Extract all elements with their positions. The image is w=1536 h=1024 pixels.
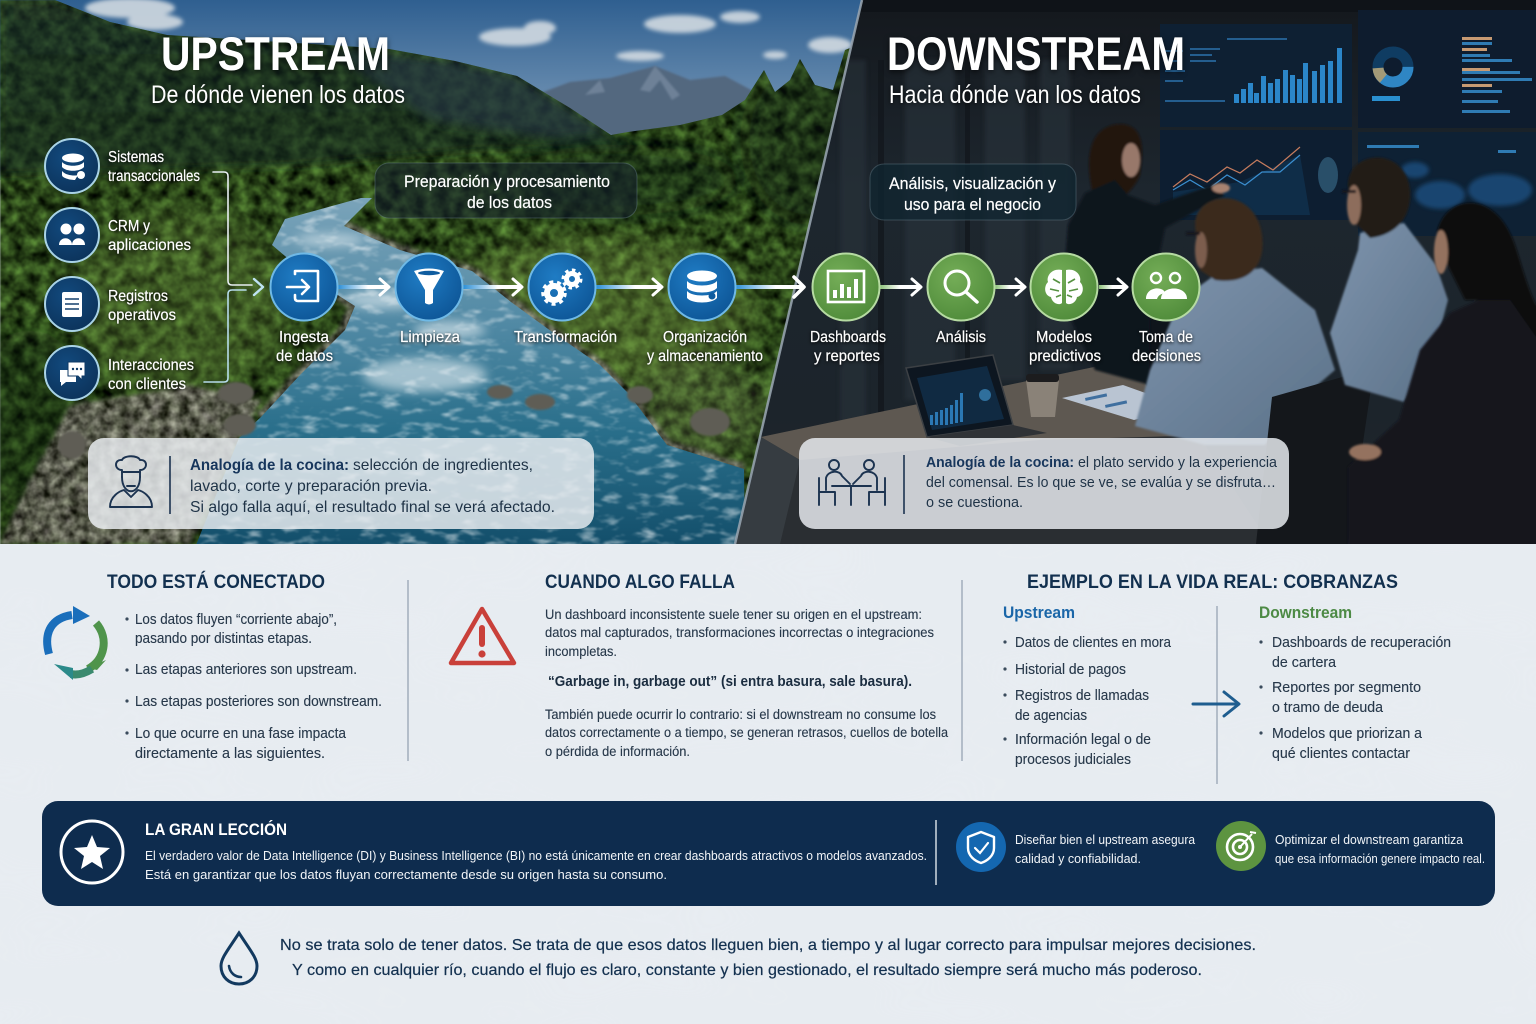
callout: analogía upstream: selección de ingredientes, (353, 457, 533, 474)
text block: “Garbage in, garbage out” (si entra basura, sale basura). (548, 674, 912, 690)
panel: downstream office scene (730, 0, 1536, 550)
callout: analogía downstream (799, 438, 1289, 529)
step: organización y almacenamiento: y almacenamiento (647, 348, 763, 365)
text block: datos mal capturados, transformaciones incorrectas o integraciones (545, 625, 934, 640)
lesson text (145, 820, 927, 882)
source: interacciones con clientes: Interacciones (108, 357, 194, 374)
icon: star (61, 821, 123, 883)
source: sistemas transaccionales: Sistemas (108, 149, 164, 166)
heading: CUANDO ALGO FALLA (545, 572, 735, 593)
arrows: upstream flow (338, 277, 804, 297)
arrows: downstream flow (880, 279, 1127, 295)
title: upstream (151, 27, 405, 109)
column: downstream (1259, 604, 1451, 762)
callout: analogía upstream: Analogía de la cocina: (190, 457, 349, 474)
caption box: preparación (375, 163, 637, 218)
analyst front (1135, 198, 1335, 445)
bullet list: Lo que ocurre en una fase impacta (135, 726, 347, 742)
column: upstream: Registros de llamadas (1015, 688, 1149, 704)
column: upstream: Información legal o de (1015, 732, 1151, 748)
callout: analogía downstream: o se cuestiona. (926, 494, 1023, 511)
presenter (1062, 124, 1230, 385)
step: dashboards y reportes: Dashboards (810, 329, 886, 346)
takeaway: upstream: calidad y confiabilidad. (1015, 851, 1141, 866)
bullet list: Las etapas posteriores son downstream. (135, 694, 382, 710)
column: downstream: Reportes por segmento (1272, 680, 1421, 696)
lesson text: Está en garantizar que los datos fluyan correctamente desde su origen hasta su consumo. (145, 867, 667, 882)
source: crm y aplicaciones: CRM y (108, 218, 150, 235)
step: ingesta de datos (270, 254, 338, 365)
icon: water drop (221, 933, 257, 984)
step: transformación: Transformación (514, 329, 617, 346)
column: downstream: Downstream (1259, 604, 1352, 622)
closing statement: No se trata solo de tener datos. Se trata de que esos datos lleguen bien, a tiempo y al lugar correcto para impulsar mejores decisiones. (280, 937, 1256, 954)
step: organización y almacenamiento (647, 254, 763, 365)
source: registros operativos (45, 277, 176, 331)
column: downstream: Dashboards de recuperación (1272, 635, 1451, 651)
river (180, 195, 750, 555)
source: registros operativos: Registros (108, 288, 168, 305)
panel: data sources (45, 139, 200, 400)
arrow: sources bracket (204, 172, 263, 382)
callout: analogía downstream: Analogía de la cocina: (926, 454, 1074, 471)
lesson text: El verdadero valor de Data Intelligence (DI) y Business Intelligence (BI) no está únicamente en crear dashboards atractivos o modelos avanzados. (145, 848, 927, 863)
title: downstream: Hacia dónde van los datos (889, 81, 1141, 109)
column: downstream: de cartera (1272, 655, 1337, 671)
callout: analogía upstream (88, 438, 594, 529)
icon: cycle arrows (47, 606, 106, 680)
closing statement (280, 937, 1256, 979)
forest (0, 0, 880, 545)
rock banks (0, 220, 746, 544)
closing statement: Y como en cualquier río, cuando el flujo es claro, constante y bien gestionado, el resultado siempre será mucho más poderoso. (292, 962, 1202, 979)
icon: chef (110, 456, 152, 507)
step: dashboards y reportes: y reportes (814, 348, 880, 365)
column: upstream (1003, 604, 1172, 768)
title: downstream: DOWNSTREAM (887, 27, 1185, 80)
step: ingesta de datos: de datos (276, 348, 333, 365)
step: toma de decisiones: decisiones (1132, 348, 1201, 365)
text block: incompletas. (545, 644, 617, 659)
panel: cuando algo falla (451, 572, 948, 759)
column: upstream: Historial de pagos (1015, 662, 1126, 678)
heading: EJEMPLO EN LA VIDA REAL: COBRANZAS (1027, 572, 1398, 593)
step: limpieza: Limpieza (400, 329, 460, 346)
step: modelos predictivos: predictivos (1029, 348, 1101, 365)
takeaway: downstream: que esa información genere impacto real. (1275, 851, 1485, 866)
caption box: análisis (870, 164, 1076, 220)
text block: datos correctamente o a tiempo, se generan retrasos, cuellos de botella (545, 725, 948, 740)
step: limpieza (396, 254, 462, 346)
step: organización y almacenamiento: Organización (663, 329, 747, 346)
lesson text: LA GRAN LECCIÓN (145, 820, 287, 839)
takeaway: upstream: Diseñar bien el upstream asegura (1015, 832, 1196, 847)
panel: la gran lección (42, 801, 1495, 906)
source: interacciones con clientes (45, 346, 194, 400)
caption box: análisis: Análisis, visualización y (889, 174, 1056, 193)
source: crm y aplicaciones (45, 208, 191, 262)
callout: analogía upstream: Si algo falla aquí, el resultado final se verá afectado. (190, 499, 555, 516)
takeaway: upstream (956, 822, 1196, 872)
column: upstream: Upstream (1003, 604, 1075, 622)
takeaway: downstream: Optimizar el downstream garantiza (1275, 832, 1464, 847)
text block: También puede ocurrir lo contrario: si el downstream no consume los (545, 707, 936, 722)
column: downstream: qué clientes contactar (1272, 746, 1410, 762)
heading: TODO ESTÁ CONECTADO (107, 571, 325, 593)
column: upstream: Datos de clientes en mora (1015, 635, 1172, 651)
source: registros operativos: operativos (108, 307, 176, 324)
panel: todo está conectado (47, 571, 382, 762)
chair (1256, 368, 1374, 544)
callout: analogía downstream: del comensal. Es lo que se ve, se evalúa y se disfruta… (926, 474, 1276, 491)
text block: Un dashboard inconsistente suele tener su origen en el upstream: (545, 607, 922, 622)
bullet list: pasando por distintas etapas. (135, 631, 312, 647)
panel: ejemplo cobranzas (1003, 572, 1451, 784)
title: upstream: UPSTREAM (161, 27, 390, 80)
panel: lower background (0, 544, 1536, 1024)
title: downstream (887, 27, 1185, 109)
icon: comensales (819, 460, 885, 505)
step: toma de decisiones (1132, 254, 1201, 365)
icon: warning triangle (451, 609, 514, 663)
column: downstream: o tramo de deuda (1272, 700, 1384, 716)
bullet list: directamente a las siguientes. (135, 746, 325, 762)
takeaway: downstream (1216, 821, 1485, 871)
bullet list: Los datos fluyen “corriente abajo”, (135, 612, 337, 628)
step: dashboards y reportes (810, 254, 886, 365)
column: downstream: Modelos que priorizan a (1272, 726, 1423, 742)
step: análisis: Análisis (936, 329, 986, 346)
callout: analogía upstream: lavado, corte y preparación previa. (190, 478, 432, 495)
step: ingesta de datos: Ingesta (279, 329, 329, 346)
bullet list: Las etapas anteriores son upstream. (135, 662, 357, 678)
column: upstream: de agencias (1015, 708, 1087, 724)
step: modelos predictivos: Modelos (1036, 329, 1092, 346)
source: sistemas transaccionales (45, 139, 200, 193)
text block: o pérdida de información. (545, 744, 690, 759)
wall screens (1160, 10, 1536, 236)
step: toma de decisiones: Toma de (1139, 329, 1193, 346)
step: análisis (928, 254, 994, 346)
analyst middle (1330, 158, 1448, 402)
column: upstream: procesos judiciales (1015, 752, 1131, 768)
panel: upstream river scene (0, 0, 880, 555)
caption box: análisis: uso para el negocio (904, 195, 1041, 214)
step: modelos predictivos (1029, 254, 1101, 365)
title: upstream: De dónde vienen los datos (151, 81, 405, 109)
source: sistemas transaccionales: transaccionales (108, 168, 200, 185)
analyst right (1348, 203, 1536, 550)
step: transformación (514, 254, 617, 346)
scene divider (735, 0, 862, 544)
caption box: preparación: de los datos (467, 193, 552, 212)
arrow: upstream to downstream (1193, 692, 1239, 716)
caption box: preparación: Preparación y procesamiento (404, 172, 610, 191)
text block (545, 607, 948, 759)
table and laptops (735, 308, 1270, 544)
bullet list (125, 612, 382, 762)
source: interacciones con clientes: con clientes (108, 376, 186, 393)
source: crm y aplicaciones: aplicaciones (108, 237, 191, 254)
callout: analogía downstream: el plato servido y la experiencia (1078, 454, 1278, 471)
